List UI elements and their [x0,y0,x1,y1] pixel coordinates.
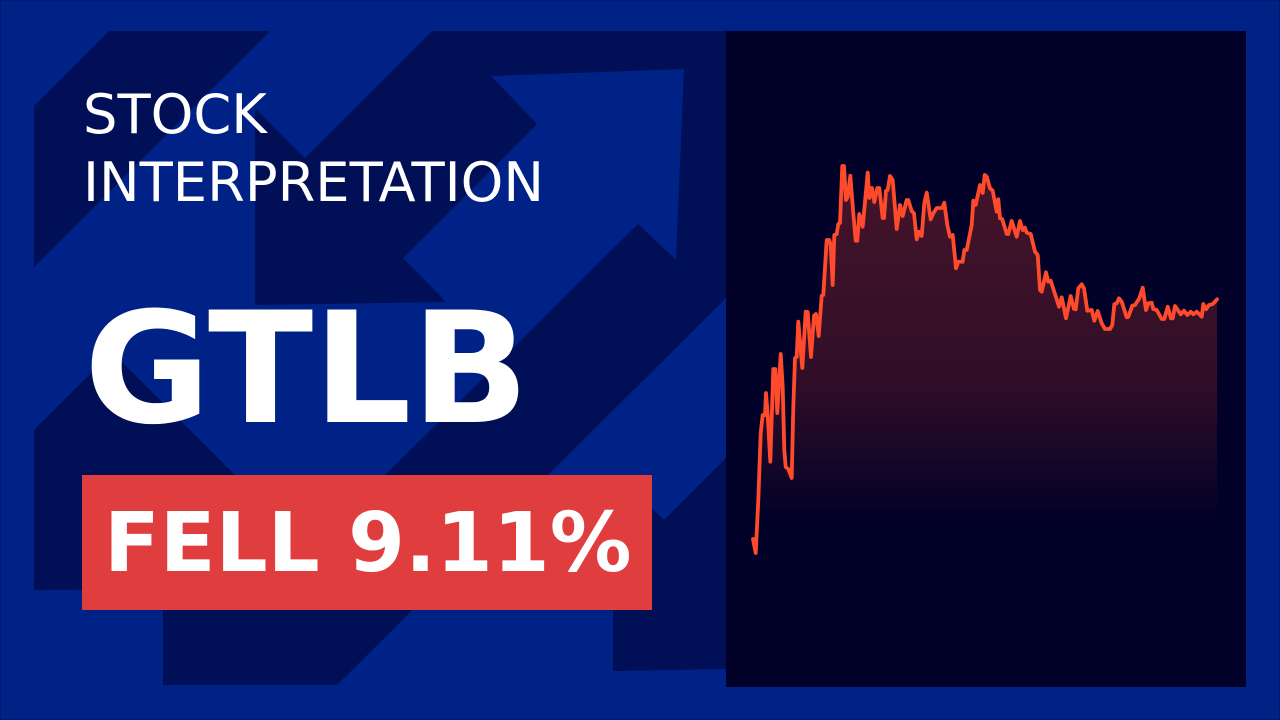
background arrows [34,31,726,685]
change badge [82,475,652,610]
title [83,83,544,214]
area fill [753,166,1217,560]
ticker: GTLB [84,280,529,459]
change badge: FELL 9.11% [104,496,632,591]
title: STOCK [83,83,268,146]
title: INTERPRETATION [83,151,544,214]
chart panel [726,31,1246,687]
price line [753,166,1217,553]
